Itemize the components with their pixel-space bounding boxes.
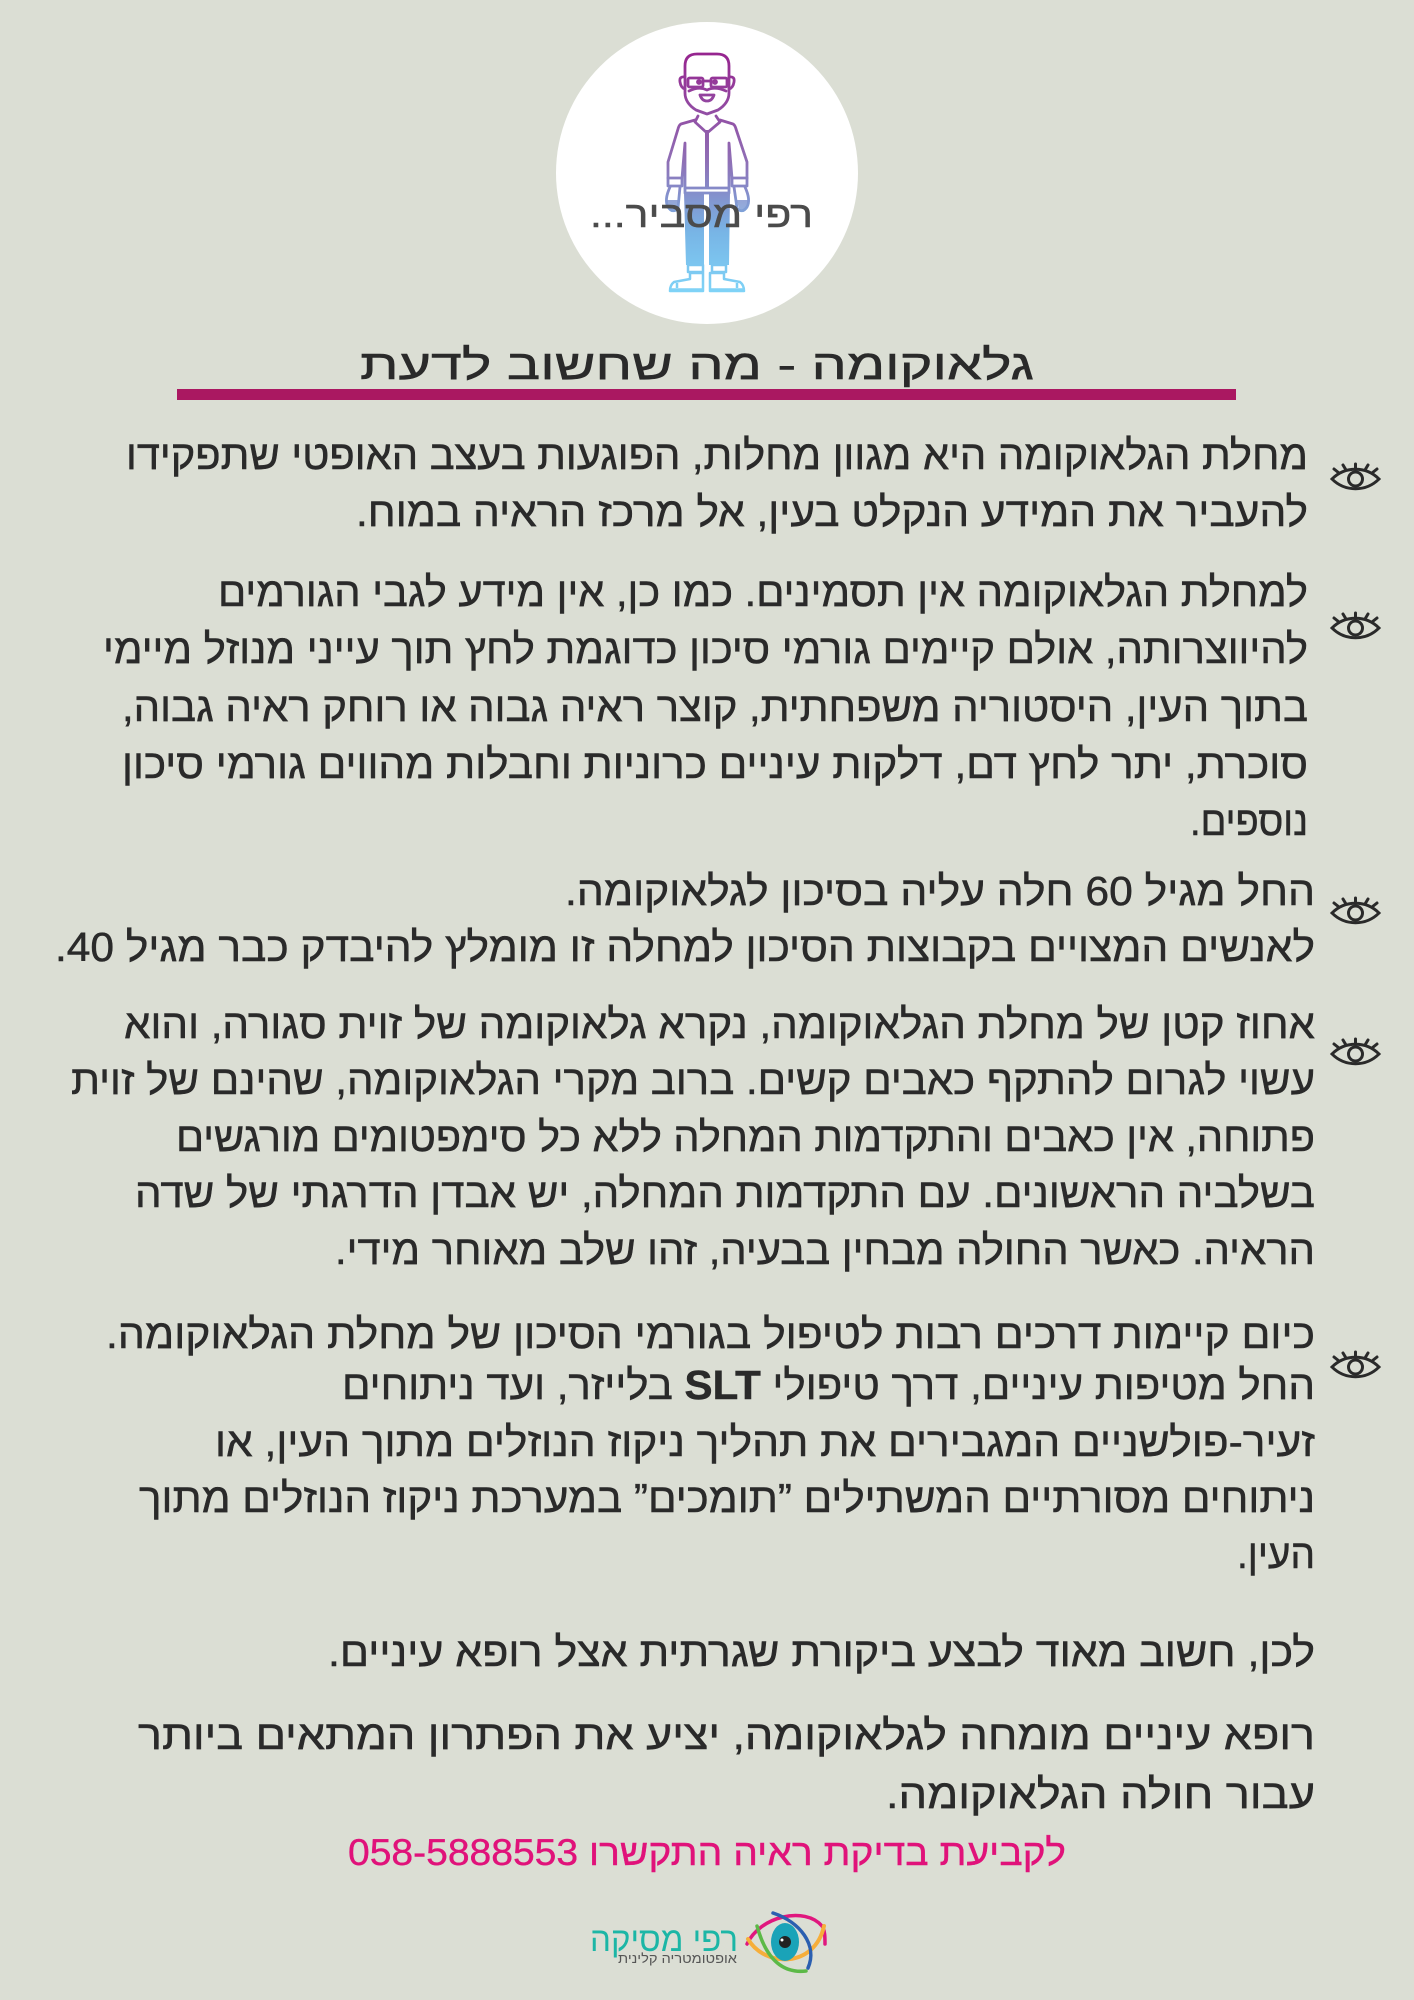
shirt placket <box>705 130 709 188</box>
contact line: לקביעת בדיקת ראיה התקשרו 058-5888553 <box>348 1832 1066 1873</box>
text: specialist advice <box>138 1712 1315 1817</box>
paragraph: treatments: כיום קיימות דרכים רבות לטיפול בגורמי הסיכון של מחלת הגלאוקומה. <box>106 1311 1315 1357</box>
speaker badge: circle with man <box>556 22 858 324</box>
bullet section 3 <box>55 868 1379 970</box>
paragraph: treatments: החל מטיפות עיניים, דרך טיפולי SLT בלייזר, ועד ניתוחים <box>342 1362 1315 1408</box>
logo name: רפי מסיקה <box>590 1921 738 1959</box>
paragraph: treatments <box>106 1311 1315 1577</box>
bullet section 1 <box>126 432 1379 535</box>
text: regular check-up advice: לכן, חשוב מאוד לבצע ביקורת שגרתית אצל רופא עיניים. <box>328 1629 1315 1675</box>
paragraph: symptoms and risk factors: להיווצרותה, אולם קיימים גורמי סיכון כדוגמת לחץ תוך עייני מנוזל מיימי <box>103 626 1308 672</box>
paragraph: symptoms and risk factors: סוכרת, יתר לחץ דם, דלקות עיניים כרוניות וחבלות מהווים גורמי סיכון <box>122 741 1308 787</box>
paragraph: what glaucoma is <box>126 432 1308 535</box>
paragraph: age risk <box>55 868 1315 970</box>
paragraph: age risk: החל מגיל 60 חלה עליה בסיכון לגלאוקומה. <box>565 868 1315 914</box>
caption: Rafi explains: רפי מסביר... <box>590 194 813 235</box>
paragraph: treatments: העין. <box>1237 1531 1315 1577</box>
hands shading <box>666 200 749 212</box>
bullet section 5 <box>106 1311 1379 1577</box>
bullet section 2 <box>103 569 1379 844</box>
icon: eye <box>1332 1352 1379 1377</box>
paragraph: what glaucoma is: להעביר את המידע הנקלט בעין, אל מרכז הראיה במוח. <box>356 489 1308 535</box>
icon: man with glasses and beard <box>666 54 749 211</box>
white circle <box>556 22 858 324</box>
paragraph: treatments: זעיר-פולשניים המגבירים את תהליך ניקוז הנוזלים מתוך העין, או <box>215 1419 1315 1465</box>
icon: eye <box>1332 464 1379 489</box>
paragraph: closed and open angle: פתוחה, אין כאבים והתקדמות המחלה ללא כל סימפטומים מורגשים <box>176 1114 1315 1160</box>
bullet section 4 <box>71 1001 1379 1273</box>
paragraph: treatments: ניתוחים מסורתיים המשתילים ”תומכים” במערכת ניקוז הנוזלים מתוך <box>139 1475 1315 1521</box>
title underline <box>177 389 1236 400</box>
icon: logo eye <box>747 1913 825 1971</box>
logo <box>590 1913 825 1971</box>
title: גלאוקומה - מה שחשוב לדעת <box>360 341 1034 388</box>
icon: eye <box>1332 898 1379 923</box>
icon: eye <box>1332 1039 1379 1064</box>
paragraph: symptoms and risk factors: בתוך העין, היסטוריה משפחתית, קוצר ראיה גבוה או רוחק ראיה גבוה, <box>122 684 1308 730</box>
shoes <box>670 265 744 291</box>
paragraph: closed and open angle: אחוז קטן של מחלת הגלאוקומה, נקרא גלאוקומה של זוית סגורה, והוא <box>124 1001 1315 1047</box>
paragraph: symptoms and risk factors <box>103 569 1308 844</box>
paragraph: closed and open angle <box>71 1001 1315 1273</box>
icon: eye <box>1332 613 1379 638</box>
paragraph: what glaucoma is: מחלת הגלאוקומה היא מגוון מחלות, הפוגעות בעצב האופטי שתפקידו <box>126 432 1308 478</box>
paragraph: closed and open angle: בשלביה הראשונים. עם התקדמות המחלה, יש אבדן הדרגתי של שדה <box>135 1170 1315 1216</box>
logo subtitle: אופטומטריה קלינית <box>618 1951 737 1966</box>
paragraph: symptoms and risk factors: למחלת הגלאוקומה אין תסמינים. כמו כן, אין מידע לגבי הגורמים <box>218 569 1308 615</box>
jeans <box>684 193 730 265</box>
text: specialist advice: עבור חולה הגלאוקומה. <box>886 1771 1315 1817</box>
text: specialist advice: רופא עיניים מומחה לגלאוקומה, יציע את הפתרון המתאים ביותר <box>138 1712 1315 1758</box>
paragraph: closed and open angle: הראיה. כאשר החולה מבחין בבעיה, זהו שלב מאוחר מידי. <box>335 1227 1315 1273</box>
paragraph: age risk: לאנשים המצויים בקבוצות הסיכון למחלה זו מומלץ להיבדק כבר מגיל 40. <box>55 924 1315 970</box>
paragraph: closed and open angle: עשוי לגרום להתקף כאבים קשים. ברוב מקרי הגלאוקומה, שהינם של זוית <box>71 1057 1315 1103</box>
paragraph: symptoms and risk factors: נוספים. <box>1190 798 1308 844</box>
